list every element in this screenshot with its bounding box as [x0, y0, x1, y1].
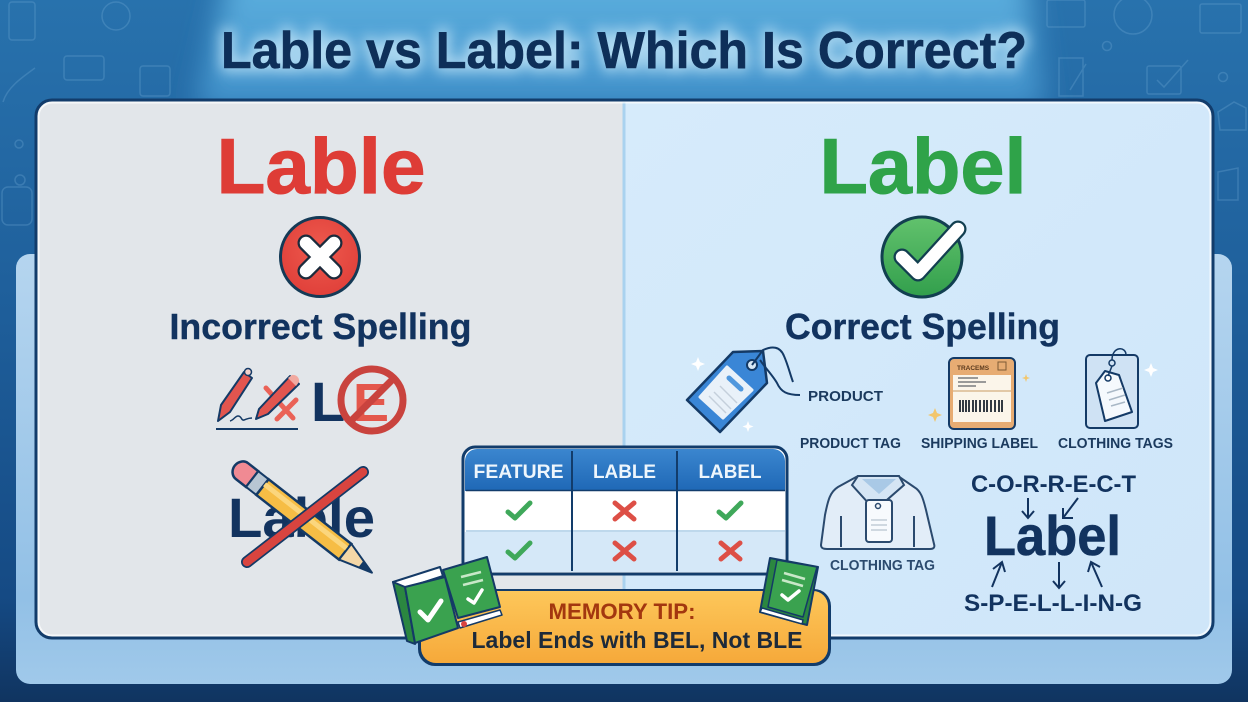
icon: green check circle [882, 217, 962, 297]
icon: L and crossed-out E: L [311, 370, 345, 433]
text: product: PRODUCT [808, 388, 883, 405]
icon: pencil [229, 458, 378, 581]
icon: green book right [760, 558, 818, 625]
icon: clothing tags [1086, 349, 1158, 428]
crossed-out word with pencil [228, 458, 378, 581]
tip heading: MEMORY TIP: [548, 599, 696, 624]
main card [36, 100, 1213, 638]
table header: lable: LABLE [593, 462, 656, 483]
word: label: Label [984, 504, 1121, 567]
table header: label: LABEL [698, 462, 762, 483]
heading: Lable: Lable [216, 122, 426, 210]
spelling diagram [964, 471, 1142, 617]
crossed-out word with pencil: Lable [228, 486, 375, 549]
tip text: Label Ends with BEL, Not BLE [472, 627, 802, 653]
table marks [508, 503, 741, 559]
icon: shirt with tag [821, 476, 934, 549]
comparison table [463, 447, 787, 574]
text: spelling: S-P-E-L-L-I-N-G [964, 590, 1142, 617]
heading: Label: Label [820, 122, 1026, 210]
table header: feature: FEATURE [474, 462, 564, 483]
icon: open green book [393, 557, 502, 644]
text: clothing tag: CLOTHING TAG [830, 558, 935, 574]
icon: pens with cross [216, 368, 299, 430]
icon: red cross circle [280, 218, 360, 296]
panel: correct [687, 122, 1173, 617]
text: product tag: PRODUCT TAG [800, 436, 901, 452]
icon: shipping label: TRACEMS [957, 365, 990, 372]
title: Lable vs Label: Which Is Correct? [221, 22, 1027, 80]
red strike line [247, 472, 363, 562]
text: correct: C-O-R-R-E-C-T [971, 471, 1136, 498]
text: shipping label: SHIPPING LABEL [921, 436, 1038, 452]
label: correct spelling: Correct Spelling [785, 306, 1060, 347]
label: incorrect spelling: Incorrect Spelling [170, 306, 472, 347]
icon: L and crossed-out E [311, 369, 403, 433]
title: Lable vs Label: Which Is Correct? [221, 22, 1027, 80]
icon: L and crossed-out E: E [353, 373, 389, 433]
lower base panel [16, 254, 1232, 684]
icon: shipping label [928, 358, 1030, 429]
panel: incorrect [170, 122, 472, 581]
text: clothing tags: CLOTHING TAGS [1058, 436, 1173, 452]
arrows [992, 498, 1102, 588]
memory tip banner [418, 589, 831, 666]
icon: product tag [687, 348, 800, 432]
